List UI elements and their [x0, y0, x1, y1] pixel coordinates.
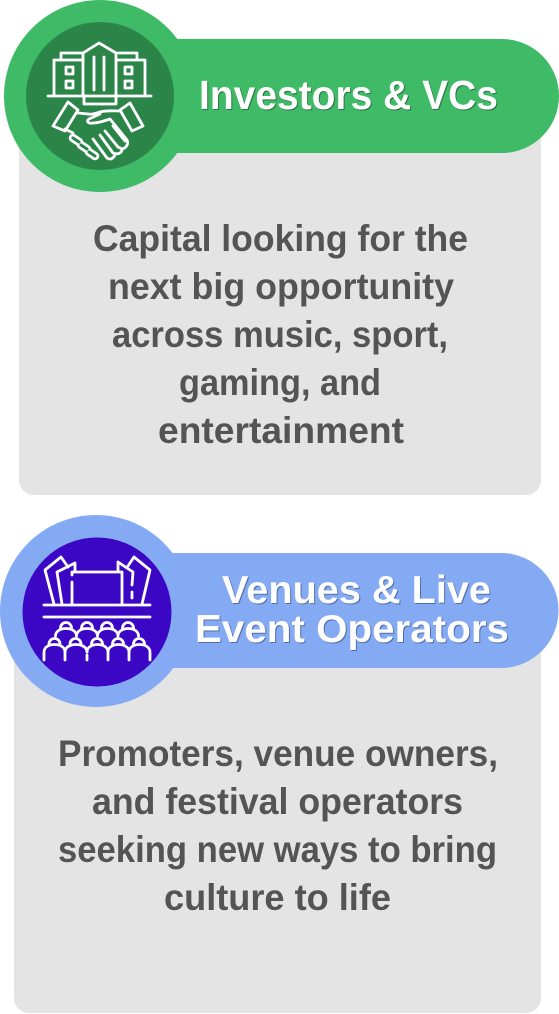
- icon: stage and audience: [44, 557, 150, 660]
- heading: [195, 569, 509, 651]
- body text: gaming, and: [179, 362, 381, 403]
- body text: [93, 218, 468, 451]
- body text: Promoters, venue owners,: [58, 733, 498, 774]
- body text: culture to life: [164, 877, 391, 918]
- header pill: [130, 553, 558, 668]
- body text: seeking new ways to bring: [58, 829, 497, 870]
- body text: across music, sport,: [112, 314, 448, 355]
- icon circle inner: [26, 22, 174, 170]
- heading: Venues & Live: [222, 569, 491, 612]
- panel: investors: [4, 0, 559, 495]
- panel: venues: [0, 515, 558, 1013]
- body text: and festival operators: [92, 781, 463, 822]
- heading: Investors & VCs: [199, 72, 498, 118]
- body text: entertainment: [158, 410, 404, 451]
- icon: buildings and handshake: [48, 43, 151, 159]
- body text: Capital looking for the: [93, 218, 468, 259]
- card background: [14, 630, 541, 1013]
- icon circle inner: [22, 538, 172, 686]
- card background: [19, 100, 541, 495]
- icon circle outer: [0, 515, 192, 707]
- header pill: [130, 39, 559, 153]
- icon circle outer: [4, 0, 196, 192]
- heading: Event Operators: [195, 608, 509, 651]
- body text: next big opportunity: [108, 266, 454, 307]
- body text: [58, 733, 498, 918]
